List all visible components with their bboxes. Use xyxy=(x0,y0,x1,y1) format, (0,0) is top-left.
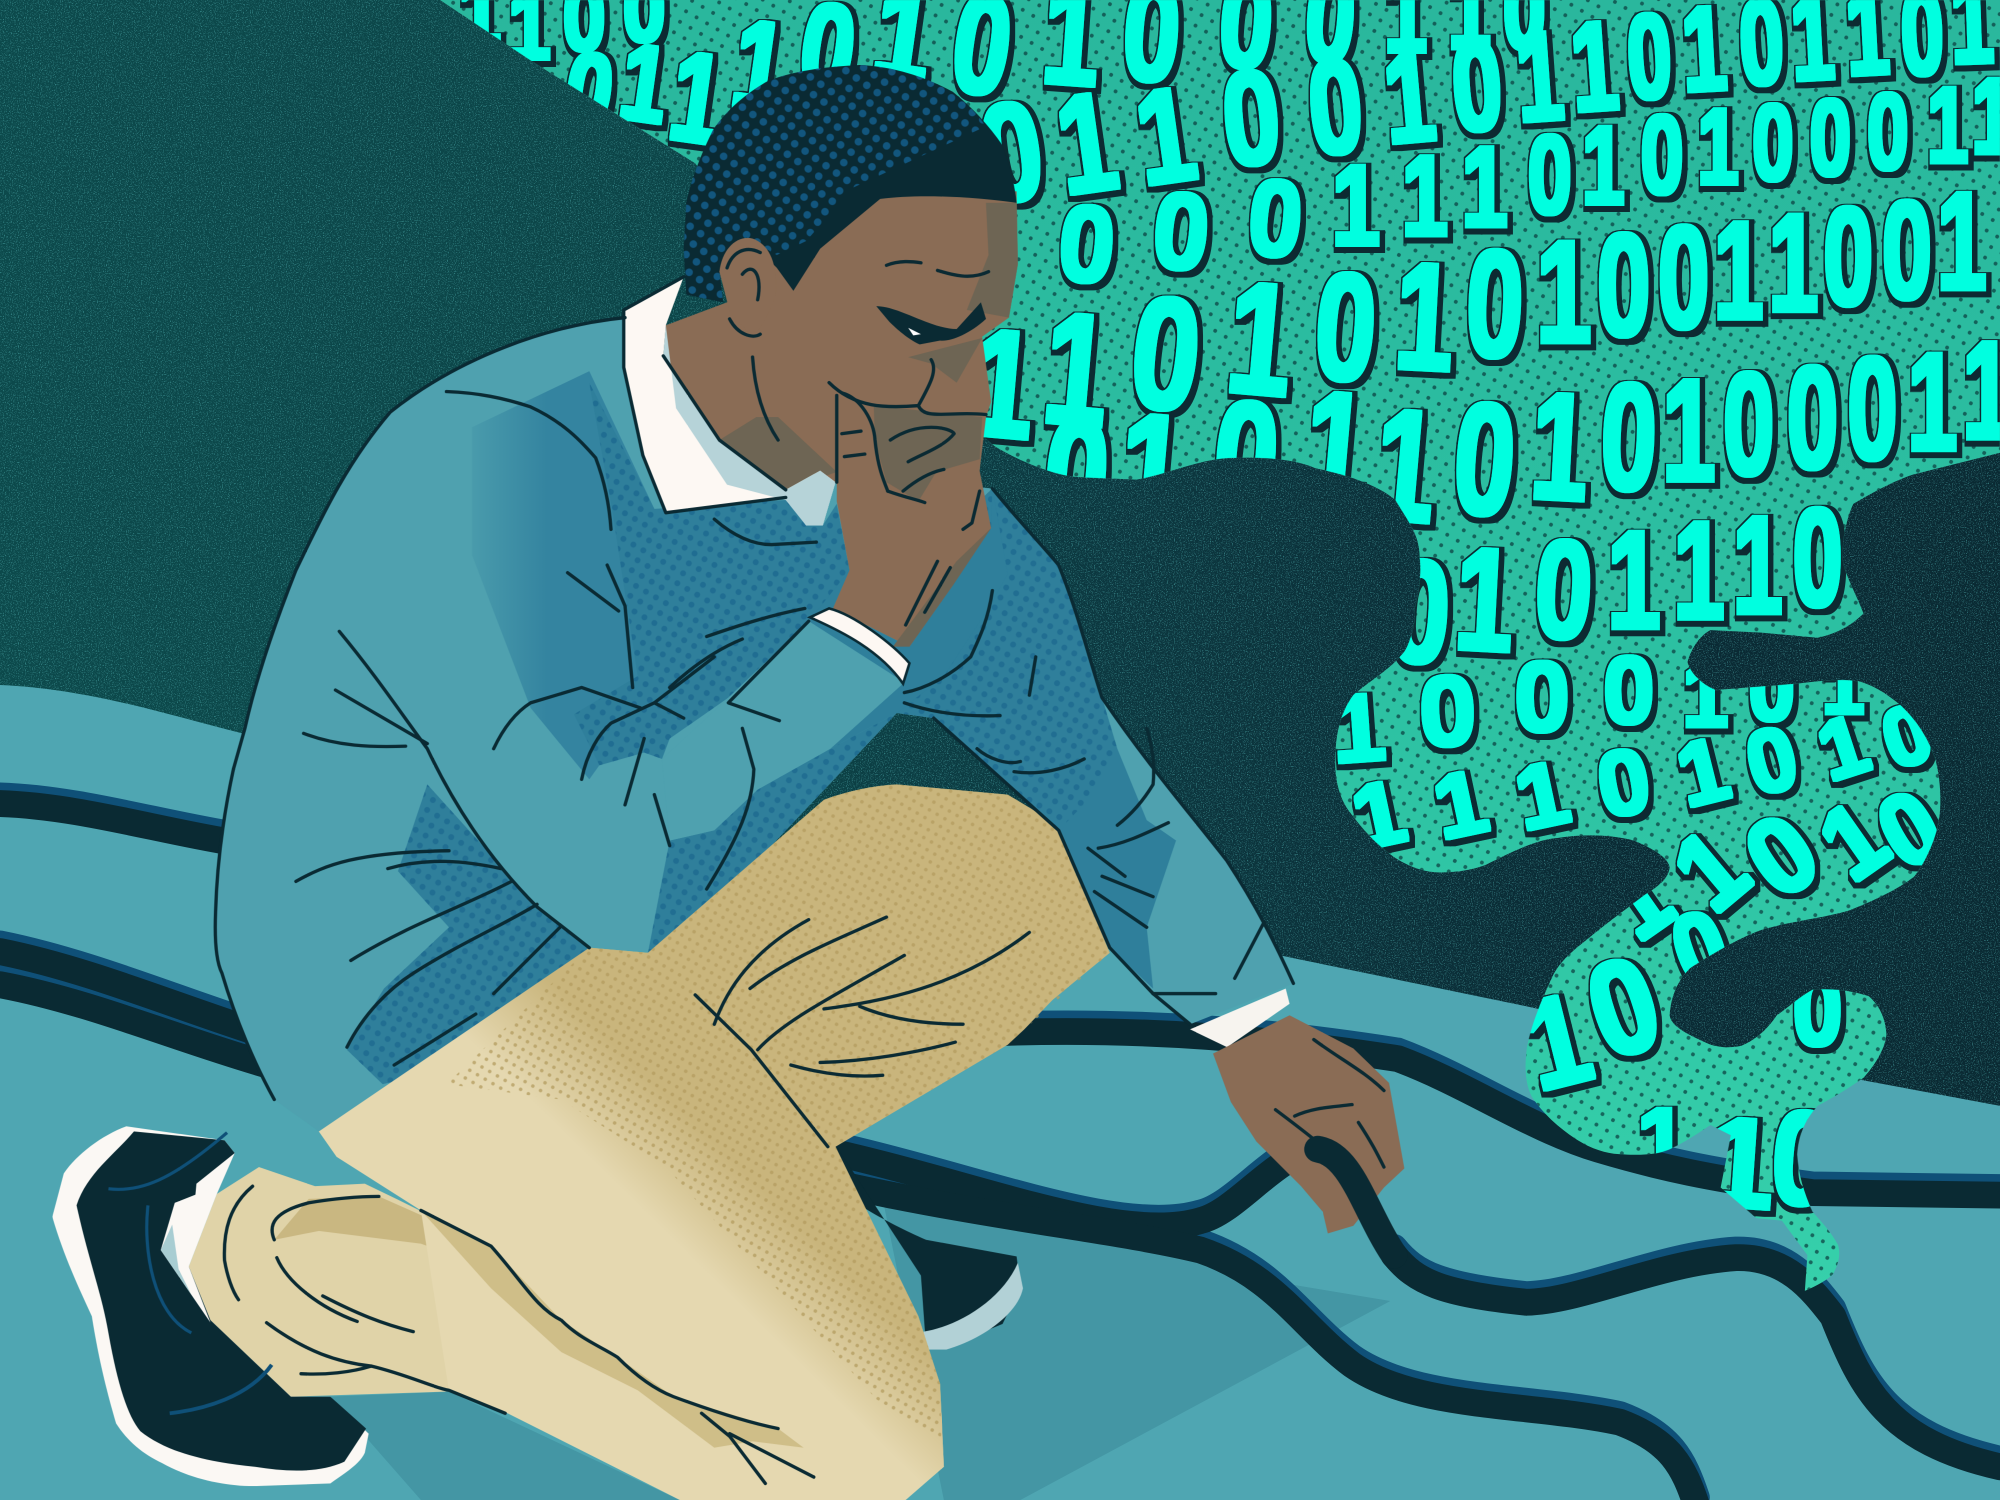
floor shadow under the shin xyxy=(330,1392,680,1500)
binary digits: 0 xyxy=(1310,241,1382,415)
front shoe xyxy=(834,1143,1023,1349)
binary digits: 0 xyxy=(1302,30,1368,184)
binary digits: 1 xyxy=(1511,966,1604,1118)
binary digits: 0 xyxy=(1603,636,1654,744)
binary digits: 1 xyxy=(1328,673,1389,784)
sweater fold lines xyxy=(215,318,1293,1099)
face shadows xyxy=(719,203,1018,647)
binary digits: 1 xyxy=(1037,279,1116,461)
binary digits: 1 xyxy=(1221,248,1300,431)
binary digits: 0 xyxy=(1417,655,1478,768)
binary digits: 1 xyxy=(1673,493,1725,650)
ear xyxy=(719,238,776,337)
binary digits: 0 xyxy=(1514,642,1570,753)
binary digits: 0 xyxy=(1531,510,1596,669)
binary digits: 1 xyxy=(1127,58,1204,215)
binary digits: 1 xyxy=(1332,141,1380,270)
binary digits: 1 xyxy=(1368,374,1443,557)
binary digits: 1 xyxy=(1507,742,1577,850)
binary digits: 1 xyxy=(1402,132,1448,261)
halftone dots xyxy=(434,0,2000,1301)
binary data spill xyxy=(434,0,2000,1301)
binary digits: 1 xyxy=(1822,639,1864,731)
binary digits: 0 xyxy=(1823,178,1873,335)
binary digits: 1 xyxy=(1298,359,1373,534)
hand lines xyxy=(1276,1040,1384,1173)
binary digits: 1 xyxy=(1607,502,1661,659)
far arm halftone xyxy=(897,489,1117,830)
near sleeve cuff xyxy=(810,608,909,684)
binary digits: 0 xyxy=(1123,263,1209,447)
trouser halftone xyxy=(446,784,1110,1441)
nose and mouth lines xyxy=(753,357,986,503)
far arm sleeve xyxy=(897,489,1293,1024)
binary digits: 0 xyxy=(1570,927,1677,1088)
binary digits: 0 xyxy=(1724,790,1840,921)
binary digits: 0 xyxy=(1464,217,1526,390)
binary digits: 0 xyxy=(1723,341,1774,506)
chest right halftone under chin xyxy=(809,489,1008,749)
binary digits: 0 xyxy=(1641,93,1683,218)
floor shadow right of the knee xyxy=(880,1186,1390,1500)
binary digits: 0 xyxy=(1528,112,1572,238)
binary digits: 1 xyxy=(1807,696,1879,799)
wall speckle texture xyxy=(0,0,2000,1148)
binary digits: 0 xyxy=(1598,351,1659,524)
binary digits: 0 xyxy=(1810,77,1851,198)
binary digits: 0 xyxy=(1448,368,1521,550)
binary digits: 0 xyxy=(1590,729,1658,838)
binary digits: 1 xyxy=(1733,487,1782,643)
binary digits: 1 xyxy=(1378,25,1440,171)
binary digits: 1 xyxy=(1908,324,1957,480)
binary digits: 0 xyxy=(1657,887,1743,1011)
cable held in the hand xyxy=(1318,1149,1394,1255)
binary digits: 1 xyxy=(1927,64,1968,186)
binary digits: 0 xyxy=(1848,326,1897,490)
binary digits: 1 xyxy=(1391,229,1458,404)
collar xyxy=(624,277,835,545)
binary digits: 0 xyxy=(1752,82,1794,204)
binary digits: 1 xyxy=(1048,61,1126,224)
binary digits: 0 xyxy=(1216,42,1286,196)
binary digits: 1 xyxy=(1800,779,1907,902)
mint data field xyxy=(434,0,2000,1301)
binary digits: 0 xyxy=(1037,385,1116,561)
binary digits: 1 xyxy=(1536,210,1591,374)
binary digits: 0 xyxy=(1054,182,1120,308)
binary digits: 0 xyxy=(1148,170,1214,295)
binary digits: 0 xyxy=(559,30,620,149)
binary digits: 0 xyxy=(1749,640,1795,740)
trousers thigh and shin xyxy=(319,784,1110,1500)
binary digits: 1 xyxy=(613,21,675,147)
lower forearm dark halftone xyxy=(648,713,897,953)
binary digits: 1 xyxy=(963,296,1042,472)
binary digits: 1 xyxy=(662,24,731,172)
binary digits: 0 xyxy=(1882,172,1932,328)
far sleeve cuff xyxy=(1190,989,1290,1047)
back shoe xyxy=(52,1126,369,1486)
binary digits: 0 xyxy=(1736,706,1807,815)
man xyxy=(52,65,1404,1500)
binary digits: 1 xyxy=(1662,349,1715,513)
binary digits: 0 xyxy=(1793,953,1842,1067)
shin shade strip xyxy=(421,1210,804,1448)
far arm shadow xyxy=(897,489,1176,989)
binary digits: 0 xyxy=(1207,367,1285,543)
far hand xyxy=(1213,1015,1404,1233)
binary digits: 1 xyxy=(1113,380,1191,556)
binary digits: 1 xyxy=(1512,4,1568,149)
lower torso dark halftone xyxy=(347,784,589,1084)
binary digits: 1 xyxy=(1582,103,1625,228)
binary digits: 1 xyxy=(1527,359,1593,534)
binary digits: 0 xyxy=(1658,195,1709,359)
binary digits: 0 xyxy=(1244,155,1307,281)
trousers back leg xyxy=(189,1167,702,1413)
binary digits: 0 xyxy=(971,69,1052,234)
binary digits: 0 xyxy=(1871,685,1943,787)
binary digits: 0 xyxy=(1793,479,1842,636)
hair xyxy=(684,65,1017,302)
binary digits: 0 xyxy=(1385,529,1454,696)
binary digits: 0 xyxy=(1767,1081,1838,1235)
binary digits: 1 xyxy=(1937,163,1987,319)
binary digits: 1 xyxy=(1637,1089,1687,1189)
binary digits: 0 xyxy=(1787,335,1838,499)
chest dark halftone xyxy=(574,383,849,765)
binary digits: 1 xyxy=(1451,516,1518,683)
binary digits: 1 xyxy=(1343,761,1414,869)
binary digits: 0 xyxy=(1447,14,1507,160)
binary digits: 1 xyxy=(1682,644,1728,747)
binary digits: 0 xyxy=(1867,71,1908,192)
sweater upper sleeve shadow xyxy=(472,371,846,779)
binary digits xyxy=(458,0,2000,1237)
trouser top band xyxy=(319,784,1110,1480)
sweater torso xyxy=(215,318,992,1131)
binary digits: 1 xyxy=(1586,840,1692,961)
binary digits: 0 xyxy=(1859,767,1960,891)
binary digits: 1 xyxy=(1651,806,1770,934)
binary digits: 0 xyxy=(1597,204,1650,367)
cables on the floor xyxy=(0,796,2000,1500)
binary digits: 1 xyxy=(1702,1090,1780,1237)
binary digits: 1 xyxy=(1714,192,1763,349)
light forearm xyxy=(662,621,904,841)
floor xyxy=(0,685,2000,1500)
dark wall background xyxy=(0,0,2000,1148)
eye and brow xyxy=(876,262,989,344)
trouser fold lines xyxy=(224,917,1029,1483)
binary digits: 1 xyxy=(1667,717,1738,826)
back leg shade xyxy=(274,1196,568,1320)
binary digits: 1 xyxy=(1425,751,1496,859)
binary digits: 1 xyxy=(1698,86,1739,207)
hand lines under chin xyxy=(842,431,980,625)
binary digits: 1 xyxy=(1769,185,1818,341)
binary digits: 1 xyxy=(1462,123,1508,252)
neck and face xyxy=(663,191,1018,647)
